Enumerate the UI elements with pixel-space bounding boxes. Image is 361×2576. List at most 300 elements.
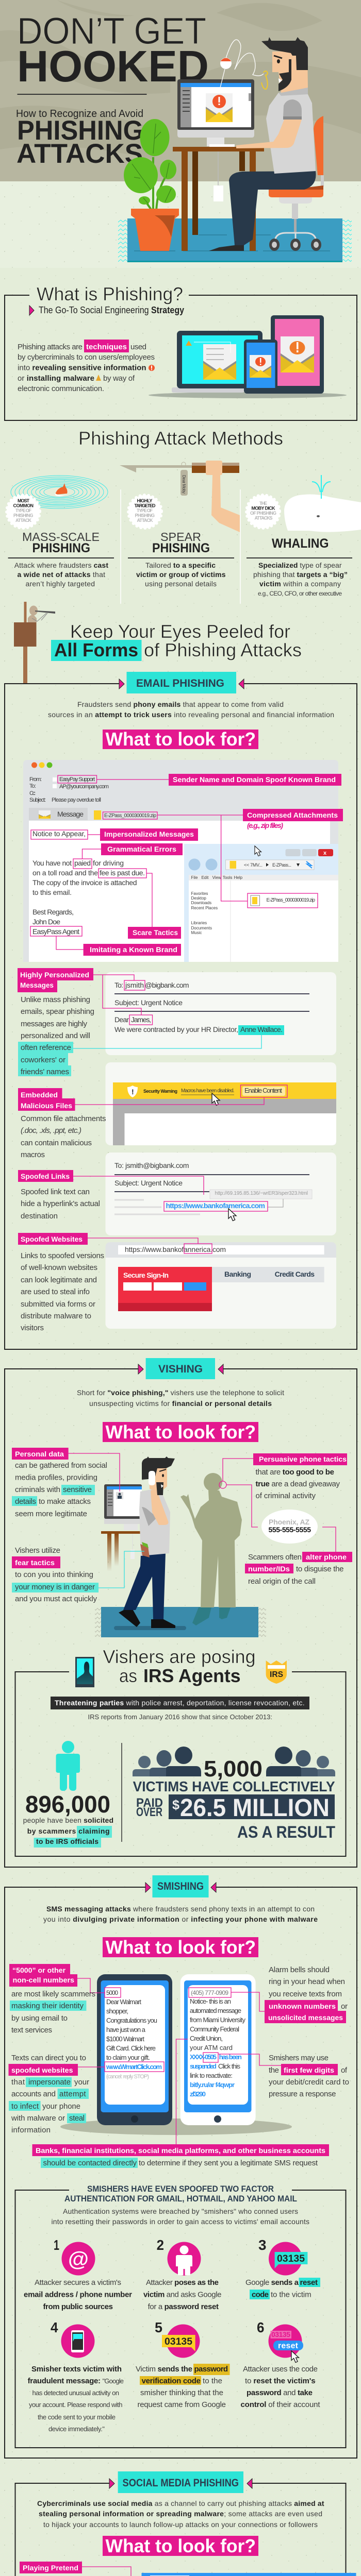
title: don't get hooked [17, 11, 209, 95]
callout: compressed attachments: (e.g., zip files) [247, 821, 283, 829]
connectors [73, 975, 261, 1048]
callout: sender name [58, 774, 341, 786]
spear phishing text: SPEAR [160, 530, 201, 544]
phone two: credit union scam: Community Federal [190, 2025, 239, 2033]
threat bar: Threatening parties with police arrest, deportation, license revocation, etc. [55, 1699, 305, 1707]
step 1: email address / phone number [24, 2291, 132, 2299]
left text: can contain malicious [21, 1139, 92, 1147]
phone number bubble [261, 1510, 318, 1544]
text: unknown numbers: Alarm bells should [269, 1965, 330, 1974]
document warning card: Macros have been disabled. [181, 1088, 234, 1094]
alter phone numbers text: number/IDs [248, 1565, 290, 1573]
statistic: 896,000: 896,000 [25, 1791, 110, 1818]
callout: scare tactics [128, 873, 181, 939]
email mockup [23, 760, 343, 962]
step 6: control of their account [240, 2400, 320, 2409]
statistic: 5,000 victims, $26.5 million: $ [172, 1797, 180, 1812]
panel: social media phishing [15, 2471, 358, 2576]
step 3: reset [300, 2278, 318, 2287]
badge: highly targeted: ATTACK [137, 518, 153, 523]
heading: What is Phishing? [37, 283, 183, 304]
email header fields: EasyPay Support [59, 776, 95, 783]
mass-scale phishing text: a wide net of attacks that [18, 570, 105, 579]
badge: moby dick [247, 495, 280, 528]
what to look for: What to look for? [105, 728, 256, 750]
document warning card: ! [132, 1088, 134, 1096]
device illustrations [149, 315, 347, 398]
subtitle [16, 108, 143, 169]
text: spoofed websites: impersonate [28, 2078, 71, 2087]
scene: plant, desk, computer, man [124, 37, 324, 251]
badge: moby dick: OF PHISHING [250, 511, 276, 516]
alter phone numbers text: alter phone [306, 1553, 347, 1561]
intro text [43, 1905, 318, 1923]
document warning card: Security Warning [143, 1089, 177, 1094]
column dividers [121, 489, 240, 604]
personal data text: can be gathered from social [15, 1461, 107, 1470]
intro text [48, 700, 334, 719]
section title: VISHING [158, 1363, 203, 1375]
source line: IRS reports from January 2016 show that since October 2013: [88, 1713, 272, 1721]
file dialog: Documents [191, 926, 212, 930]
text: unknown numbers [231, 1965, 348, 2023]
left text: hide a hyperlink's actual [21, 1199, 100, 1208]
file dialog: File [191, 875, 198, 880]
left text: messages are highly [21, 1020, 88, 1028]
statistic: 896,000: to be IRS officials [36, 1837, 99, 1845]
email header fields: Cc: [29, 790, 36, 796]
callout: compressed attachments [157, 809, 343, 908]
rug [95, 1607, 266, 1637]
step 5: 5 [155, 2319, 162, 2335]
computer monitor [177, 79, 254, 147]
text: spoofed websites: your phone [42, 2102, 80, 2111]
left text: friends' names [21, 1067, 69, 1076]
badge: most common [7, 495, 40, 528]
statistic: 5,000 victims, $26.5 million: PAID [136, 1796, 163, 1810]
step 5: password [194, 2365, 228, 2374]
left text [18, 1088, 106, 1159]
intro text [37, 2499, 324, 2529]
shadow man [180, 1473, 242, 1625]
message text with callouts: to this email. [32, 888, 72, 896]
step 5 [136, 2319, 230, 2409]
message text with callouts: fee is past due. [100, 869, 145, 877]
personal data text: sensitive [63, 1485, 92, 1494]
connector [75, 1097, 264, 1105]
website card: Banking [224, 1270, 251, 1278]
social network mockup [141, 2573, 358, 2576]
text: unknown numbers: unknown numbers [269, 2002, 336, 2010]
banner: contact directly [32, 2039, 329, 2168]
statistic: 896,000 [23, 1791, 113, 1848]
message body [29, 821, 330, 962]
phone one: walmart scam: shopper, [106, 2007, 128, 2015]
left text: coworkers' or [21, 1056, 65, 1064]
heading [52, 2184, 309, 2226]
alter phone numbers text [245, 1527, 352, 1586]
phone one: walmart scam: Dear Walmart [106, 1998, 141, 2006]
intro text: unsuspecting victims for financial or personal details [89, 1399, 272, 1408]
intro text: SMS messaging attacks where fraudsters send phony texts in an attempt to con [46, 1905, 315, 1913]
intro text: Short for "voice phishing," vishers use the telephone to solicit [77, 1388, 284, 1397]
personal data text: seem more legitimate [15, 1510, 87, 1518]
file dialog: Music [191, 930, 202, 935]
phone silhouette icon [75, 1657, 94, 1687]
section title [145, 1875, 216, 1897]
definition text: electronic communication. [18, 384, 104, 393]
left text: often reference [21, 1043, 71, 1052]
phone two: credit union scam: XXXX-0505 [190, 2053, 217, 2061]
spear phishing text [128, 530, 234, 588]
step 5: smisher thinking that the [140, 2388, 223, 2397]
subtitle: ATTACKS [17, 139, 143, 169]
phone one: walmart scam: have just won a [106, 2026, 146, 2033]
left text [18, 1170, 100, 1221]
row: spoofed links [18, 1153, 336, 1235]
step 3 [245, 2237, 320, 2299]
step 2: victim and asks Google [143, 2291, 222, 2299]
heading: Keep Your Eyes Peeled for [70, 621, 290, 642]
panel: keep your eyes peeled [14, 602, 302, 684]
step 3: to the victim [271, 2291, 311, 2299]
text: non-cell numbers [9, 1964, 105, 2035]
phone two: credit union scam: zf3290 [190, 2090, 206, 2098]
file dialog: Tools [223, 875, 232, 880]
step 3: 03135 [277, 2253, 305, 2264]
personal data text: criminals with [15, 1485, 60, 1494]
IRS agents subpanel [15, 1646, 346, 1856]
victims crowd icons [133, 1747, 335, 1776]
intro text: you into divulging private information or infecting your phone with malware [43, 1915, 318, 1923]
phone one: walmart scam: Gift Card. Click here [106, 2044, 156, 2052]
file dialog: x [323, 850, 327, 856]
step 2: 2 [157, 2237, 164, 2253]
alter phone numbers text: real origin of the call [248, 1577, 316, 1586]
intro text: to hijack your accounts to launch follow-up attacks on your connections or followers [43, 2520, 318, 2529]
heading: Vishers are posing [103, 1646, 256, 1667]
badge: moby dick: MOBY DICK [252, 506, 275, 511]
intro text: Fraudsters send phony emails that appear to come from valid [77, 700, 284, 708]
title: don't get hooked: DON’T GET [17, 11, 206, 52]
attachment tab: E-ZPass_0000300019.zip [104, 813, 156, 819]
step 4: "Google [103, 2377, 124, 2385]
text: first few digits: pressure a response [269, 2090, 336, 2098]
IRS badge [266, 1660, 287, 1684]
left text: Links to spoofed versions [21, 1251, 104, 1260]
text: unknown numbers: unsolicited messages [268, 2013, 343, 2022]
desk [173, 147, 264, 251]
step 5: verification code [142, 2377, 201, 2385]
step 2: for a password reset [148, 2302, 219, 2311]
card: To: [114, 981, 123, 989]
text: unknown numbers: ring in your head when [269, 1977, 345, 1986]
phone number bubble: 555-555-5555 [268, 1526, 311, 1534]
panel: smishing [5, 1875, 357, 2458]
text: non-cell numbers: text services [11, 2026, 52, 2035]
definition text: techniques [86, 343, 127, 351]
whaling text: WHALING [272, 536, 329, 551]
mass-scale phishing text [8, 530, 114, 588]
lookout illustration [14, 602, 55, 684]
file dialog: View [212, 875, 221, 880]
step 5: Victim sends the [136, 2365, 192, 2374]
personal data text: details [15, 1497, 36, 1506]
statistic: 5,000 victims, $26.5 million: 26.5 MILLION [180, 1794, 330, 1822]
row: highly personalized messages [18, 968, 336, 1076]
badge: most common: PHISHING [13, 513, 33, 518]
definition text: into revealing sensitive information [18, 364, 146, 372]
left text [18, 968, 94, 1076]
callout: imitating a known brand: Imitating a Known Brand [90, 945, 177, 954]
step 4 [28, 2319, 124, 2433]
left text: Common file attachments [21, 1114, 106, 1123]
email header fields: AP@yourcompany.com [59, 784, 109, 790]
inner frame [15, 2190, 346, 2448]
statistic: 5,000 victims, $26.5 million [133, 1756, 335, 1841]
link card: Subject: Urgent Notice [114, 1179, 183, 1187]
badge: moby dick: THE [259, 501, 267, 506]
callout: sender name: Sender Name and Domain Spoof Known Brand [173, 775, 336, 784]
text: spoofed websites: attempt [59, 2090, 86, 2098]
step 4: your account. Please respond with [29, 2401, 123, 2409]
persuasive phone tactics text: of criminal activity [256, 1492, 316, 1500]
left text: personalized and will [21, 1031, 90, 1040]
statistic: 5,000 victims, $26.5 million: OVER [136, 1805, 162, 1819]
card: jsmith [125, 981, 144, 989]
message text with callouts: paied [74, 859, 91, 867]
wall background [0, 0, 361, 181]
text: first few digits: your debit/credit card to [269, 2078, 349, 2087]
text: spoofed websites: that [11, 2078, 25, 2087]
step 1: @ [68, 2248, 89, 2270]
rug [118, 218, 352, 262]
file dialog: Edit [202, 875, 209, 880]
whaling text: victim within a company [259, 580, 341, 588]
personal data text: media profiles, providing [15, 1473, 97, 1482]
heading: Authentication systems were breached by "smishers" who conned users [63, 2207, 298, 2215]
step 4: the code sent to your mobile [38, 2413, 116, 2421]
step 6: to reset the victim's [245, 2377, 316, 2385]
text: unknown numbers: you receive texts from [269, 1990, 342, 1998]
step 6: reset [278, 2342, 299, 2350]
message text with callouts: John Doe [32, 918, 60, 926]
text: playing pretend [20, 2562, 215, 2576]
heading: SMISHERS HAVE EVEN SPOOFED TWO FACTOR [87, 2184, 274, 2194]
statistic: 5,000 victims, $26.5 million: 5,000 [204, 1756, 262, 1782]
left text: Messages [20, 981, 54, 989]
subtitle: How to Recognize and Avoid [16, 108, 143, 120]
threat bar [51, 1697, 309, 1709]
left text: can look legitimate and [21, 1276, 97, 1284]
link card: To: jsmith@bigbank.com [114, 1161, 189, 1170]
IRS badge: IRS [270, 1670, 283, 1679]
attachment tab [29, 808, 157, 820]
panel: what is phishing [5, 283, 357, 420]
email header fields: Subject: [29, 797, 46, 803]
definition text: Phishing attacks are [18, 343, 83, 351]
message text with callouts: for driving [93, 859, 124, 867]
statistic: 896,000: by scammers claiming [27, 1827, 110, 1835]
definition text: used [130, 343, 146, 351]
step 3: 3 [258, 2237, 266, 2253]
text: playing pretend: Playing Pretend [23, 2564, 78, 2572]
whaling text: Specialized type of spear [258, 561, 342, 569]
document warning card: Enable Content [244, 1087, 282, 1094]
card [105, 972, 336, 1055]
left text: destination [21, 1212, 58, 1221]
step 4: device immediately." [48, 2425, 105, 2433]
vishing computer and desk [101, 1484, 142, 1571]
section title [119, 672, 244, 693]
fear tactics text: your money is in danger [15, 1583, 95, 1591]
panel: hero [0, 0, 361, 268]
left text: emails, spear phishing [21, 1007, 94, 1016]
message text with callouts [30, 843, 183, 936]
whaling text: e.g., CEO, CFO, or other executive [258, 590, 342, 597]
what to look for: What to look for? [105, 1937, 256, 1958]
statistic: 5,000 victims, $26.5 million: VICTIMS HAVE COLLECTIVELY [133, 1778, 335, 1794]
statistic: 5,000 victims, $26.5 million: AS A RESULT [237, 1823, 335, 1841]
mass-scale phishing text: aren’t highly targeted [26, 580, 95, 588]
step 6 [240, 2319, 320, 2409]
phone one: walmart scam: (cancel: reply STOP) [106, 2074, 149, 2080]
step 3: Google sends a [245, 2278, 299, 2287]
website card: Secure Sign-In [123, 1271, 169, 1279]
chair [269, 116, 324, 251]
persuasive phone tactics text: that are too good to be [256, 1468, 334, 1477]
callout: impersonalized messages: Impersonalized Messages [104, 830, 194, 838]
fear tactics text: fear tactics [15, 1558, 55, 1567]
fear tactics text: to con you into thinking [15, 1570, 93, 1579]
spear illustration [120, 461, 240, 532]
panel: email phishing [5, 672, 357, 1349]
definition text: or installing malware [18, 374, 94, 383]
badge: highly targeted: TARGETED [134, 503, 156, 508]
message text with callouts: You have not [32, 859, 72, 867]
phone two: credit union scam [180, 1974, 256, 2125]
step 4: fraudulent message: [28, 2377, 101, 2385]
text: spoofed websites: steal [69, 2114, 85, 2123]
connector [73, 1176, 204, 1195]
whaling text: phishing that targets a “big” [253, 570, 348, 579]
whale [284, 475, 361, 532]
left text: Unlike mass phishing [21, 995, 90, 1004]
attachment tab: Message [57, 810, 84, 818]
heading: IRS Agents [143, 1665, 240, 1686]
section title: EMAIL PHISHING [136, 677, 224, 689]
heading: All Forms [54, 639, 138, 660]
phone one: walmart scam: to claim your gift. [106, 2054, 150, 2061]
phone two: credit union scam: (405) 777-0909 [191, 1989, 228, 1996]
subheading: The Go-To Social Engineering Strategy [39, 305, 184, 315]
phone two: credit union scam: automated message [190, 2007, 241, 2014]
laptop [177, 331, 262, 388]
left text: submitted via forms or [21, 1300, 95, 1309]
phone two: credit union scam: Credit Union, [190, 2035, 223, 2042]
phone two: credit union scam: bitly.ru/ar f4qwpr [190, 2081, 235, 2089]
left text: macros [21, 1150, 45, 1159]
panel frame [5, 295, 357, 420]
two factor subpanel [15, 2184, 346, 2448]
personal data text [12, 1448, 120, 1518]
card: Dear [114, 1015, 129, 1024]
fear tactics text [12, 1546, 144, 1603]
text: spoofed websites: your [74, 2078, 89, 2087]
text: first few digits: of [341, 2066, 348, 2075]
statistic: 896,000: people have been solicited [23, 1816, 113, 1824]
heading [103, 1646, 256, 1686]
phone two: credit union scam: your ATM card [190, 2044, 233, 2052]
step 4: Smisher texts victim with [31, 2365, 122, 2374]
step 1 [24, 2237, 132, 2311]
mass-scale phishing text: PHISHING [32, 541, 90, 555]
mass-scale phishing text: MASS-SCALE [22, 530, 100, 544]
persuasive phone tactics text: true are a dead giveaway [256, 1480, 340, 1488]
definition text: by way of [103, 374, 135, 383]
definition text: by cybercriminals to con users/employees [18, 353, 155, 362]
frame [15, 2483, 346, 2576]
step 6: Attacker uses the code [243, 2365, 318, 2374]
step 1: 1 [54, 2237, 59, 2253]
phone one: walmart scam: 5000 [106, 1989, 118, 1996]
mass-scale ripples and float [11, 476, 108, 509]
phone two: credit union scam: Notice- this is an [190, 1997, 231, 2005]
email header fields [29, 776, 109, 803]
step 5: to the [203, 2377, 222, 2385]
phone two: credit union scam: link to reactivate: [190, 2072, 233, 2079]
callout: imitating a known brand [56, 936, 181, 956]
section title [138, 1358, 223, 1379]
divider [121, 1743, 122, 1842]
power cord [214, 151, 223, 201]
badge: highly targeted [128, 495, 161, 528]
left text: distribute malware to [21, 1312, 91, 1320]
phone one: walmart scam: Congratulations you [106, 2016, 157, 2024]
warning email icon [206, 93, 233, 122]
banner: contact directly: Banks, financial institutions, social media platforms, and other business accounts [36, 2146, 325, 2155]
alter phone numbers text: to disguise the [296, 1565, 343, 1573]
phone one: walmart scam [97, 1974, 172, 2125]
callout: impersonalized messages [31, 828, 198, 841]
step 3: code [252, 2291, 269, 2299]
file dialog: Help [234, 875, 243, 880]
left text: Spoofed link text can [21, 1188, 90, 1196]
plant leaves [124, 119, 176, 211]
text: non-cell numbers: non-cell numbers [12, 1976, 74, 1984]
text: spoofed websites: with malware or [11, 2114, 65, 2123]
section title: SOCIAL MEDIA PHISHING [123, 2477, 239, 2489]
callout: scare tactics: Scare Tactics [133, 928, 178, 937]
website card: Credit Cards [275, 1270, 315, 1278]
file dialog: << 7MV... [244, 862, 262, 868]
connector [88, 1238, 198, 1244]
card: We were contracted by your HR Director, [114, 1025, 238, 1033]
badge: most common: MOST [18, 498, 30, 503]
phone two: credit union scam: suspended [190, 2062, 217, 2070]
left text: (.doc, .xls, .ppt, etc.) [21, 1126, 81, 1135]
website card: https://www.bankofannerica.com [125, 1245, 226, 1253]
frame [5, 1887, 357, 2458]
badge: highly targeted: HIGHLY [137, 498, 153, 503]
left text: Malicious Files [21, 1101, 72, 1110]
email header fields: Please pay overdue toll [52, 797, 101, 803]
text: first few digits: the [269, 2066, 279, 2075]
file dialog: Recent Places [191, 906, 218, 910]
email header fields: To: [29, 783, 36, 789]
whaling text [247, 536, 352, 597]
intro text: Cybercriminals use social media as a channel to carry out phishing attacks aimed at [37, 2499, 324, 2507]
